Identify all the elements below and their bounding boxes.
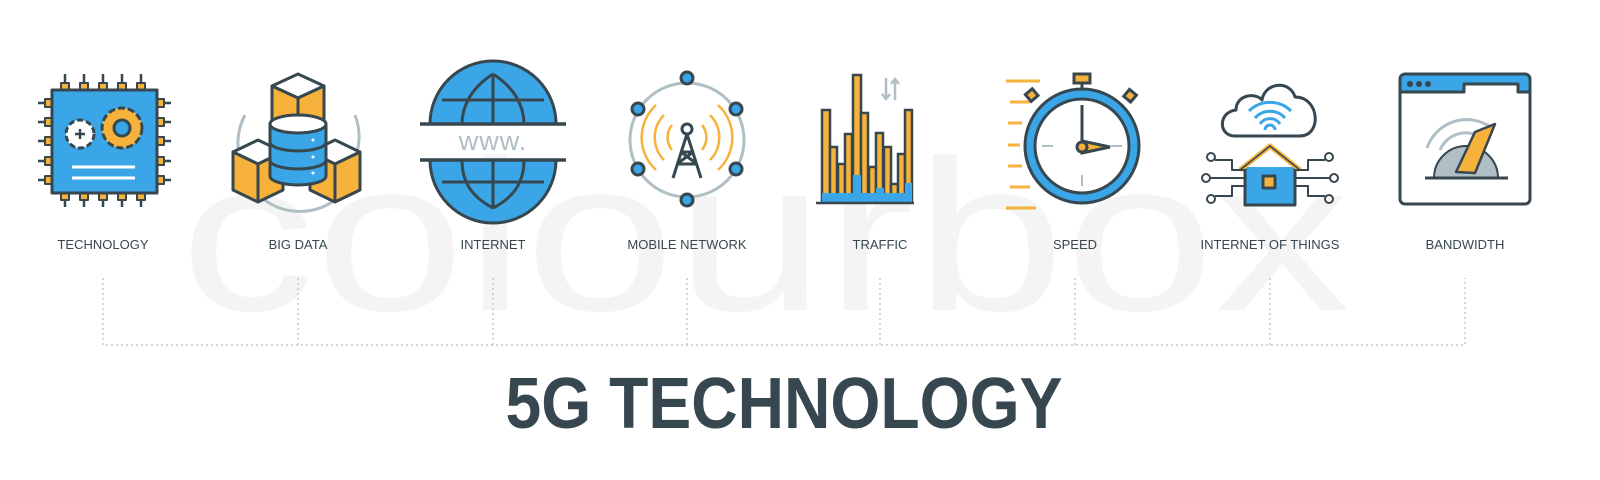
icon: bandwidth <box>1400 74 1530 204</box>
label: internet of things: INTERNET OF THINGS <box>1201 237 1340 252</box>
label: bandwidth: BANDWIDTH <box>1426 237 1504 252</box>
label: mobile network: MOBILE NETWORK <box>627 237 747 252</box>
icon: mobile network <box>630 72 744 206</box>
watermark: colourbox <box>180 115 1350 356</box>
icon: speed stopwatch <box>1006 74 1139 208</box>
label: internet: INTERNET <box>460 237 526 252</box>
icon: traffic bars <box>816 75 914 203</box>
connector lines <box>103 278 1465 345</box>
icon: technology chip <box>38 74 171 207</box>
label: technology: TECHNOLOGY <box>57 237 149 252</box>
icon: big data <box>233 74 360 211</box>
icon: internet of things <box>1202 85 1338 205</box>
label: big data: BIG DATA <box>269 237 328 252</box>
label: speed: SPEED <box>1053 237 1097 252</box>
label: traffic: TRAFFIC <box>853 237 907 252</box>
icon: internet globe: www. <box>458 126 527 156</box>
title: 5G TECHNOLOGY <box>506 364 1062 444</box>
icon: internet globe <box>420 61 566 223</box>
